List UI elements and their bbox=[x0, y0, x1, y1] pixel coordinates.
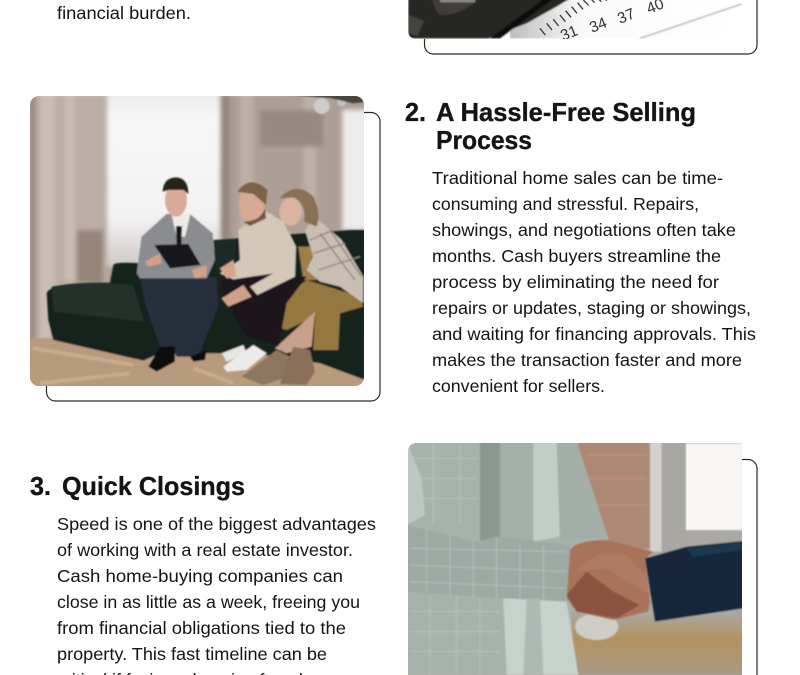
text: section 2 paragraph: convenient for sellers. bbox=[432, 376, 605, 396]
man right bbox=[220, 277, 307, 347]
text: section 3 paragraph: close in as little as a week, freeing you bbox=[57, 592, 360, 612]
text: section 3 paragraph: property. This fast timeline can be bbox=[57, 644, 327, 664]
heading: section 2: 2. bbox=[405, 97, 426, 127]
text: section 2 paragraph: makes the transaction faster and more bbox=[432, 350, 742, 370]
photo: handshake bbox=[407, 442, 743, 675]
text: section 2 paragraph: months. Cash buyers streamline the bbox=[432, 246, 721, 266]
heading: section 2: A Hassle-Free Selling bbox=[436, 97, 696, 127]
text: section 2 paragraph: repairs or updates, staging or showings, bbox=[432, 298, 751, 318]
heading: section 3: 3. bbox=[30, 471, 51, 501]
text: section 3 paragraph: of working with a real estate investor. bbox=[57, 540, 353, 560]
outline frame behind calculator photo bbox=[424, 0, 757, 54]
text: section 2 paragraph: Traditional home sales can be time- bbox=[432, 168, 723, 188]
sleeve right bbox=[645, 541, 743, 622]
text: section 2 paragraph bbox=[432, 168, 756, 396]
outline frame behind meeting photo bbox=[46, 112, 380, 401]
photo labels: printed ruler numbers: 31 bbox=[558, 22, 580, 45]
outline frame behind handshake photo bbox=[742, 460, 757, 675]
photo labels: printed ruler numbers: 37 bbox=[615, 5, 637, 28]
text: section 3 paragraph: Cash home-buying companies can bbox=[57, 566, 343, 586]
agent bbox=[140, 277, 218, 357]
text: section 2 paragraph: consuming and stressful. Repairs, bbox=[432, 194, 699, 214]
sofa bbox=[47, 230, 365, 380]
woman head bbox=[279, 198, 302, 226]
text: section 2 paragraph: showings, and negotiations often take bbox=[432, 220, 736, 240]
text: section 3 paragraph bbox=[57, 514, 376, 675]
text: section 2 paragraph: process by eliminating the need for bbox=[432, 272, 719, 292]
text: end of section 1 paragraph: financial burden. bbox=[57, 3, 191, 23]
heading: section 3: Quick Closings bbox=[62, 471, 245, 501]
heading: section 2 bbox=[405, 97, 696, 155]
photo: calculator on paper bbox=[408, 0, 750, 39]
photo labels: printed ruler numbers bbox=[560, 0, 664, 39]
text: section 3 paragraph: from financial obligations tied to the bbox=[57, 618, 346, 638]
text: section 3 paragraph: Speed is one of the biggest advantages bbox=[57, 514, 376, 534]
woman coat bbox=[305, 217, 363, 303]
shirt bbox=[407, 442, 608, 675]
text: section 2 paragraph: and waiting for financing approvals. This bbox=[432, 324, 756, 344]
floor bbox=[27, 338, 367, 388]
hands bbox=[567, 540, 653, 620]
heading: section 2: Process bbox=[436, 125, 532, 155]
photo labels: printed ruler numbers: 34 bbox=[587, 14, 610, 37]
woman dress and legs bbox=[277, 280, 363, 350]
photo: agent meeting couple on sofa bbox=[27, 93, 367, 390]
